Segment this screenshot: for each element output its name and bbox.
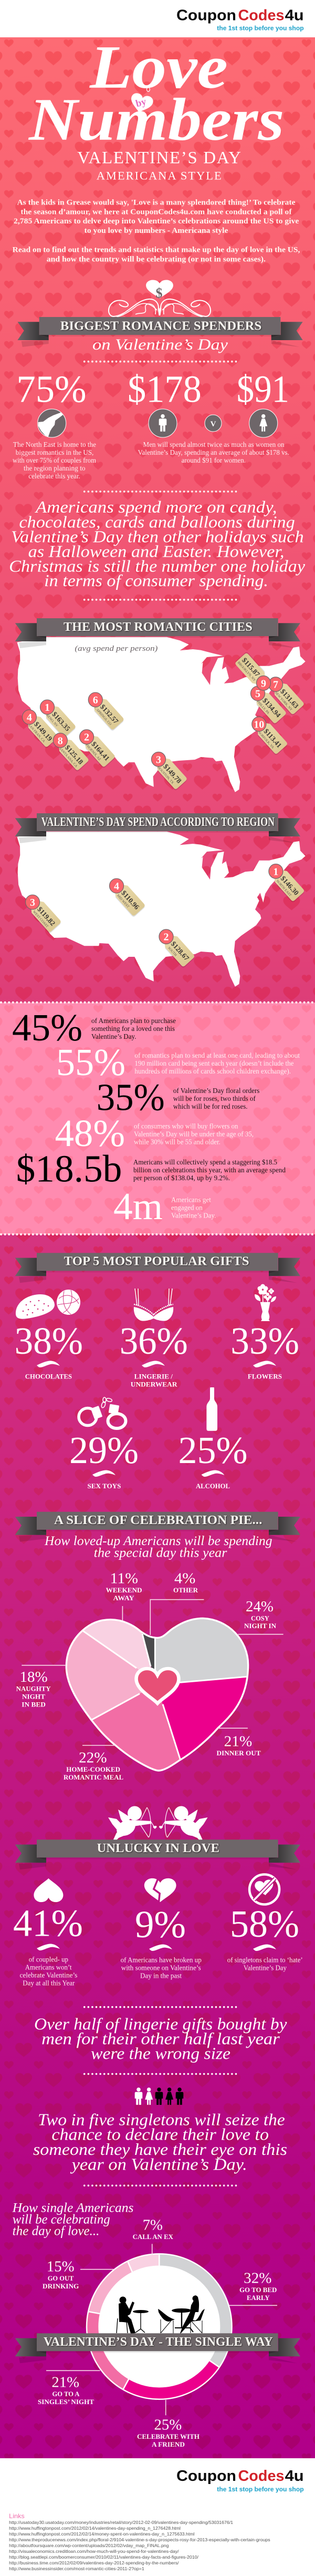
tag: Norfolk: 10 <box>254 719 264 730</box>
pin: number nine: 9 <box>261 678 266 689</box>
tag: New York <box>269 677 305 716</box>
tag: Philly <box>251 686 287 725</box>
tag: Colorado Springs: 6 <box>93 694 98 706</box>
icon: dollar heart with flourish: $ <box>155 285 163 301</box>
source links: http://usatoday30.usatoday.com/money/industries/retail/story/2012-02-09/valentines-day-spending/53031676/1 <box>9 2520 233 2525</box>
stat: 41 percent <box>13 1878 83 1987</box>
callout: Americans spend more: Americans spend more on candy, <box>35 497 277 516</box>
ring label: go to bed early: 32% <box>244 2270 271 2287</box>
ribbon: most romantic cities: THE MOST ROMANTIC CITIES <box>64 620 253 634</box>
source links: Links <box>9 2512 25 2520</box>
callout: two in five singletons: someone they have their eye on this <box>33 2140 287 2159</box>
tag: South: $128.67 <box>170 940 191 962</box>
source links: http://aboutfoursquare.com/wp-content/uploads/2012/02/vday_map_FINAL.png <box>9 2543 169 2548</box>
stat: 4 million: Americans get <box>171 1196 211 1204</box>
stat: 48 percent: of consumers who will buy flowers on <box>134 1122 238 1130</box>
ring label: celebrate with a friend <box>137 2417 200 2448</box>
tag: Houston: $149.78 <box>162 762 183 785</box>
tag: San Fran: SAN FRAN, CA <box>27 723 46 743</box>
logo: header <box>176 7 304 32</box>
tag: West Coast: 3 <box>30 897 35 908</box>
icon: wine bottle <box>206 1387 217 1431</box>
logo: header: 4u <box>285 7 304 24</box>
gift: chocolates: CHOCOLATES <box>25 1373 72 1381</box>
gift: chocolates: 38% <box>15 1320 83 1362</box>
tag: New York: NEW YORK, NY <box>274 691 293 712</box>
tag: West Coast <box>25 895 62 934</box>
gift: lingerie <box>120 1289 188 1388</box>
tag: Brooklyn: $115.87 <box>240 656 261 678</box>
tag: Santa Ana: 8 <box>58 735 63 747</box>
ornament: leaf <box>37 1361 60 1367</box>
tag: Santa Ana <box>53 733 90 772</box>
ring label: go to bed early <box>239 2270 277 2302</box>
icon: broken heart <box>144 1878 176 1903</box>
stat: 75 percent North East: the region planning to <box>24 464 86 472</box>
callout: two in five singletons <box>33 2110 287 2173</box>
stat: 48 percent: Valentine’s Day will be under the age of 35, <box>134 1130 254 1138</box>
title <box>28 34 284 182</box>
pie label: other: 4% <box>174 1570 195 1587</box>
callout: two in five singletons: year on Valentine’s Day. <box>70 2154 247 2173</box>
logo: footer: 4u <box>285 2468 304 2485</box>
icon: woman <box>249 409 278 437</box>
tag: Philly: $134.94 <box>261 697 282 719</box>
stat: 35 percent: of Valentine’s Day floral orders <box>173 1087 259 1095</box>
callout: lingerie wrong size: Over half of lingerie gifts bought by <box>34 2015 287 2033</box>
source links <box>9 2512 270 2571</box>
stat: 48 percent: 48% <box>55 1112 125 1154</box>
tag: Norfolk <box>252 717 289 756</box>
tag: Reno: 1 <box>45 702 50 713</box>
tag: Colorado Springs <box>88 692 125 731</box>
icon: upside down heart <box>34 1878 63 1902</box>
tag: Houston: 3 <box>156 754 161 765</box>
source links: http://blog.seattlepi.com/boomerconsumer/2010/02/11/valentines-day-facts-and-figures-2010/ <box>9 2554 199 2560</box>
stat: men vs women spend: $91 <box>237 367 289 410</box>
pie label: dinner out <box>216 1733 261 1757</box>
stat: 4 million: Valentine’s Day. <box>171 1212 216 1220</box>
pie label: weekend away <box>106 1570 142 1602</box>
tag: Houston <box>151 752 188 791</box>
stat: 9 percent <box>121 1878 202 1979</box>
stat: 9 percent: Day in the past <box>140 1971 182 1979</box>
tag: Colorado Springs: $132.57 <box>99 703 120 725</box>
stat: 4 million: 4m <box>113 1185 163 1228</box>
ribbon: unlucky in love <box>15 1839 300 1869</box>
ring label: go to bed early: EARLY <box>247 2294 270 2302</box>
title: Numbers <box>28 86 284 153</box>
ring label: celebrate with a friend: CELEBRATE WITH <box>137 2432 200 2440</box>
callout: two in five singletons: chance to declare their love to <box>51 2125 269 2144</box>
stat: 48 percent <box>55 1112 254 1154</box>
gift: lingerie: LINGERIE / <box>134 1373 173 1381</box>
stat: 35 percent: which will be for red roses. <box>173 1102 248 1110</box>
tag: Brooklyn: BROOKLYN, NY <box>237 661 256 682</box>
callout: Americans spend more: Christmas is still the number one holiday <box>9 556 306 575</box>
pie label: naughty night in bed: IN BED <box>22 1700 46 1708</box>
pie label: weekend away: AWAY <box>113 1594 134 1602</box>
stat: 35 percent <box>97 1076 259 1119</box>
source links: http://business.time.com/2012/02/09/valentines-day-2012-spending-by-the-numbers/ <box>9 2560 179 2565</box>
pie label: cosy night in: COSY <box>251 1614 269 1622</box>
stat: 58 percent: Valentine’s Day <box>244 1964 287 1971</box>
tag: Mid West: $110.96 <box>120 889 141 911</box>
pie label: cosy night in: NIGHT IN <box>244 1622 277 1630</box>
source links: http://www.businessinsider.com/most-romantic-cities-2011-2?op=1 <box>9 2566 144 2571</box>
ring label: go out drinking: GO OUT <box>48 2274 74 2282</box>
tag: Reno: $163.35 <box>50 710 72 733</box>
ornament: leaf <box>253 1361 276 1367</box>
subheading: how single Americans: the day of love... <box>13 2224 99 2238</box>
pie label: weekend away: 11% <box>110 1570 138 1587</box>
pie label: home-cooked romantic meal <box>64 1750 123 1781</box>
callout: lingerie wrong size <box>34 2015 287 2063</box>
ornament: leaf <box>142 1361 165 1367</box>
tag: New York: 7 <box>273 679 278 691</box>
intro text: Read on to find out the trends and statistics that make up the day of love in the US, <box>13 246 300 254</box>
pie label: cosy night in: 24% <box>246 1598 274 1615</box>
tag: South <box>159 929 196 968</box>
icon: versus: V <box>211 420 216 428</box>
intro text <box>13 198 300 263</box>
stat: 55 percent: 55% <box>56 1041 125 1083</box>
tag: Norfolk: NORFOLK, VA <box>257 730 275 750</box>
ring label: go out drinking <box>43 2258 79 2290</box>
stat: 18.5 billion: $18.5b <box>16 1148 122 1190</box>
stat: 75 percent North East: The North East is home to the <box>13 441 96 448</box>
tag: Colorado Springs: C.SPRINGS, CO <box>93 706 112 726</box>
tag: Phoenix: 2 <box>84 732 89 743</box>
chart: heart pie <box>22 1599 284 1772</box>
stat: 41 percent: celebrate Valentine’s <box>20 1971 77 1979</box>
tag: Phoenix: $164.41 <box>90 740 111 762</box>
icon: man at table silhouette <box>117 2296 149 2334</box>
logo: footer <box>176 2468 304 2493</box>
subheading: how single Americans: How single Americans <box>12 2201 134 2215</box>
tag: Mid West <box>109 878 146 917</box>
logo: footer: Codes <box>238 2468 285 2485</box>
title: Love <box>89 34 228 101</box>
ring label: celebrate with a friend: A FRIEND <box>152 2440 185 2448</box>
pie label: dinner out: 21% <box>224 1733 252 1750</box>
stat: men vs women spend: $178 <box>128 367 202 410</box>
intro text: the season d’amour, we here at CouponCodes4u.com have conducted a poll of <box>20 208 292 216</box>
stat: men vs women spend: around $91 for women. <box>182 456 246 464</box>
map: United States <box>17 637 306 792</box>
stat: 55 percent: 190 million card being sent each year (doesn’t include the <box>134 1059 294 1067</box>
ornament: leaf <box>202 1470 225 1477</box>
pie label: naughty night in bed <box>16 1669 51 1708</box>
title: AMERICANA STYLE <box>97 169 222 182</box>
stat: 58 percent: 58% <box>230 1903 299 1945</box>
ring label: go to a singles night: GO TO A <box>52 2390 80 2398</box>
tag: San Fran <box>22 710 59 749</box>
pie label: other <box>173 1570 198 1594</box>
stat: 75 percent North East: celebrate this year. <box>28 472 80 480</box>
stat: 55 percent: hundreds of millions of cards school children exchange). <box>134 1067 291 1075</box>
gift: sex toys: 29% <box>69 1429 139 1471</box>
tag: Mid West: MID WEST <box>116 894 130 908</box>
stat: 55 percent <box>56 1041 300 1083</box>
stat: 75 percent North East <box>13 367 96 480</box>
stat: men vs women spend: Valentine’s Day, spending an average of about $178 vs. <box>138 448 289 456</box>
gift: flowers <box>230 1284 299 1381</box>
tag: Philly: 5 <box>255 688 260 700</box>
source links: http://www.huffingtonpost.com/2012/02/14/money-spent-on-valentines-day_n_1275633.html <box>9 2531 195 2537</box>
ribbon: the single way <box>15 2333 300 2363</box>
callout: two in five singletons: Two in five singletons will seize the <box>38 2110 285 2129</box>
panel: most romantic cities map <box>17 637 306 792</box>
pie label: home-cooked romantic meal: HOME-COOKED <box>66 1765 120 1773</box>
ring label: go to bed early: GO TO BED <box>239 2286 277 2294</box>
stat: 45 percent: 45% <box>12 1006 82 1049</box>
stat: 55 percent: of romantics plan to send at least one card, leading to about <box>134 1051 300 1059</box>
gift: flowers: FLOWERS <box>248 1373 282 1381</box>
pie label: dinner out: DINNER OUT <box>216 1749 261 1757</box>
icon: handcuffs <box>79 1397 126 1428</box>
logo: footer: the 1st stop before you shop <box>217 2486 304 2493</box>
gift: alcohol: 25% <box>178 1429 248 1471</box>
stat: men vs women spend <box>128 367 289 464</box>
stat: 48 percent: while 30% will be 55 and older. <box>134 1138 220 1146</box>
logo: footer: Coupon <box>176 2468 236 2485</box>
stat: 58 percent <box>227 1875 303 1971</box>
tag: Brooklyn <box>234 651 268 687</box>
ring label: go to a singles night <box>38 2374 94 2406</box>
stat: 45 percent <box>12 1006 176 1049</box>
note: avg spend: (avg spend per person) <box>75 645 158 653</box>
stat: men vs women spend: Men will spend almost twice as much as women on <box>143 441 285 448</box>
ribbon: biggest romance spenders <box>17 317 303 347</box>
callout: Americans spend more: Valentine’s Day then other holidays such <box>11 527 304 546</box>
stat: 9 percent: 9% <box>135 1903 186 1946</box>
ring label: go to a singles night: 21% <box>51 2374 79 2391</box>
tag: Phoenix <box>80 730 116 769</box>
callout: Americans spend more: chocolates, cards and balloons during <box>19 512 295 531</box>
icon: centre heart <box>136 1669 178 1703</box>
stat: 58 percent: of singletons claim to ‘hate’ <box>227 1956 303 1964</box>
stat: 41 percent: Americans won’t <box>25 1964 72 1971</box>
tag: Santa Ana: SANTA ANA, CA <box>58 747 78 768</box>
gift: lingerie: 36% <box>120 1320 188 1362</box>
tag: San Fran: 4 <box>27 712 32 723</box>
source links: http://visualeconomics.creditloan.com/how-much-will-you-spend-for-valentines-day/ <box>9 2549 179 2554</box>
ribbon: slice of celebration pie <box>15 1512 300 1542</box>
ornament: leaf <box>253 1944 276 1951</box>
stat: 4 million: engaged on <box>171 1204 203 1212</box>
ribbon: the single way: VALENTINE’S DAY - THE SINGLE WAY <box>44 2335 273 2349</box>
ring label: go to a singles night: SINGLES’ NIGHT <box>38 2398 94 2406</box>
tag: South: 2 <box>164 932 169 943</box>
stat: 18.5 billion: per person of $138.04, up by 9.2%. <box>133 1174 230 1182</box>
tag: Reno: RENO, NV <box>45 713 59 728</box>
logo: header: Codes <box>238 7 285 24</box>
ring label: call an ex: CALL AN EX <box>133 2233 174 2241</box>
icon: flower vase <box>255 1284 276 1321</box>
pie label: cosy night in <box>244 1598 277 1630</box>
ribbon: top 5 gifts: TOP 5 MOST POPULAR GIFTS <box>64 1254 249 1269</box>
ring label: go out drinking: DRINKING <box>43 2282 79 2290</box>
stat: 45 percent: something for a loved one this <box>91 1025 175 1033</box>
callout: lingerie wrong size: men for their other half last year <box>41 2029 280 2048</box>
icon: no love sign <box>249 1875 279 1904</box>
gift: chocolates <box>15 1290 83 1381</box>
tag: Philly: PHILLY, PA <box>256 700 270 715</box>
pie label: other: OTHER <box>173 1586 198 1594</box>
ribbon: slice of celebration pie: A SLICE OF CELEBRATION PIE... <box>54 1513 262 1527</box>
tag: North East: 1 <box>273 866 278 877</box>
ring label: celebrate with a friend: 25% <box>154 2417 182 2434</box>
tag: South: SOUTH <box>167 946 177 957</box>
tag: San Fran: $149.19 <box>33 720 54 743</box>
tag: North East: $146.30 <box>279 874 300 897</box>
stat: 35 percent: will be for roses, two thirds of <box>173 1095 256 1102</box>
logo: header: Coupon <box>176 7 236 24</box>
tag: Mid West: 4 <box>114 881 119 892</box>
icon: dollar heart with flourish <box>109 280 211 317</box>
intro text: to you love by numbers - Americana style <box>85 227 228 235</box>
icon: bra <box>134 1289 173 1321</box>
pie label: naughty night in bed: NIGHT <box>22 1692 45 1700</box>
subheading: how loved-up Americans: How loved-up Americans will be spending <box>44 1534 272 1548</box>
logo: header: the 1st stop before you shop <box>217 25 304 32</box>
pie label: naughty night in bed: NAUGHTY <box>16 1684 51 1692</box>
gift: alcohol: ALCOHOL <box>196 1482 230 1490</box>
icon: two in five people <box>135 2088 183 2105</box>
gift: lingerie: UNDERWEAR <box>131 1381 177 1388</box>
leader lines <box>46 2244 277 2415</box>
callout: Americans spend more <box>9 497 306 590</box>
pin: number nine <box>256 676 271 690</box>
callout: Americans spend more: as Halloween and Easter. However, <box>28 541 284 560</box>
icon: versus <box>205 415 222 432</box>
gift: flowers: 33% <box>230 1320 299 1362</box>
ornament: leaf <box>92 1470 116 1477</box>
callout: Americans spend more: in terms of consumer spending. <box>44 571 268 590</box>
tag: Santa Ana: $125.18 <box>64 743 85 766</box>
ornament: leaf <box>149 1944 172 1951</box>
tag: Norfolk: $113.41 <box>262 727 284 749</box>
subheading: on Valentine's Day: on Valentine’s Day <box>92 336 228 353</box>
ribbon: region spend <box>15 813 300 843</box>
ring label: call an ex <box>133 2217 174 2241</box>
source links: http://www.theproducenews.com/index.php/floral-2/9104-valentine-s-day-prospects-rosy-for-2013-especially-with-certain-groups <box>9 2537 270 2542</box>
icon: north east map <box>38 409 66 437</box>
stat: 75 percent North East: 75% <box>16 367 87 410</box>
ribbon: unlucky in love: UNLUCKY IN LOVE <box>97 1841 219 1855</box>
ribbon: biggest romance spenders: BIGGEST ROMANCE SPENDERS <box>60 319 261 333</box>
stat: 41 percent: 41% <box>13 1902 83 1945</box>
pie label: home-cooked romantic meal: ROMANTIC MEAL <box>64 1773 123 1781</box>
map: United States regions <box>17 832 306 987</box>
callout: lingerie wrong size: were the wrong size <box>91 2044 230 2063</box>
tag: Houston: HOUSTON, TX <box>156 765 174 785</box>
intro text: As the kids in Grease would say, 'Love is a many splendored thing!’ To celebrate <box>17 198 296 207</box>
panel: spend according to region map <box>17 832 306 987</box>
chart: single way ring <box>46 2244 277 2415</box>
tag: North East: NORTH EAST <box>275 879 292 897</box>
tag: North East <box>269 864 306 903</box>
subheading: how single Americans <box>12 2201 134 2238</box>
pie label: home-cooked romantic meal: 22% <box>79 1750 107 1766</box>
stat: 4 million <box>113 1185 216 1228</box>
intro text: 2,785 Americans to delve deep into Valentine’s celebrations around the US to give <box>14 217 299 226</box>
ribbon: most romantic cities <box>15 618 300 648</box>
ring label: go out drinking: 15% <box>47 2258 75 2275</box>
ornament: leaf <box>37 1944 60 1950</box>
stat: 41 percent: Day at all this Year <box>23 1979 75 1987</box>
stat: 9 percent: with someone on Valentine’s <box>121 1964 201 1971</box>
subheading: how loved-up Americans <box>44 1534 272 1560</box>
subheading: how loved-up Americans: the special day this year <box>94 1546 227 1560</box>
tag: Phoenix: PHOENIX, AZ <box>85 743 101 761</box>
pie label: weekend away: WEEKEND <box>106 1586 142 1594</box>
icon: by heart charm <box>128 87 154 115</box>
stat: 9 percent: of Americans have broken up <box>121 1956 202 1964</box>
icon: man <box>149 409 177 437</box>
tag: West Coast: $119.82 <box>36 905 57 927</box>
stat: 45 percent: of Americans plan to purchase <box>91 1017 176 1025</box>
stat: 75 percent North East: with over 75% of couples from <box>13 456 96 464</box>
tag: Reno <box>40 700 77 739</box>
icon: cupids <box>108 1806 208 1841</box>
intro text: and how the country will be celebrating (or not in some cases). <box>47 255 266 263</box>
source links: http://www.huffingtonpost.com/2012/02/14/valentines-day-spending_n_1276428.html <box>9 2526 181 2531</box>
stat: 35 percent: 35% <box>97 1076 165 1119</box>
ring label: call an ex: 7% <box>143 2217 163 2234</box>
icon: chocolates <box>16 1290 80 1319</box>
stat: 75 percent North East: biggest romantics in the US, <box>16 448 93 456</box>
subheading: how single Americans: will be celebrating <box>13 2212 110 2226</box>
gift: sex toys: SEX TOYS <box>87 1482 121 1490</box>
ribbon: top 5 gifts <box>15 1253 300 1283</box>
icon: by heart charm: by <box>134 96 148 109</box>
stat: 18.5 billion: billion on celebrations this year, with an average spend <box>133 1166 286 1174</box>
stat: 18.5 billion <box>16 1148 286 1190</box>
title: VALENTINE’S DAY <box>77 149 241 168</box>
gift: sex toys <box>69 1397 139 1490</box>
pie label: naughty night in bed: 18% <box>20 1669 48 1685</box>
stat: 45 percent: Valentine’s Day. <box>91 1033 136 1040</box>
leader lines <box>22 1600 284 1745</box>
tag: New York: $131.63 <box>279 688 300 710</box>
icon: woman at table silhouette <box>158 2295 205 2335</box>
gift: alcohol <box>178 1387 248 1490</box>
stat: 18.5 billion: Americans will collectively spend a staggering $18.5 <box>133 1158 277 1166</box>
tag: West Coast: WEST COAST <box>32 910 49 928</box>
stat: 41 percent: of coupled- up <box>29 1956 68 1964</box>
